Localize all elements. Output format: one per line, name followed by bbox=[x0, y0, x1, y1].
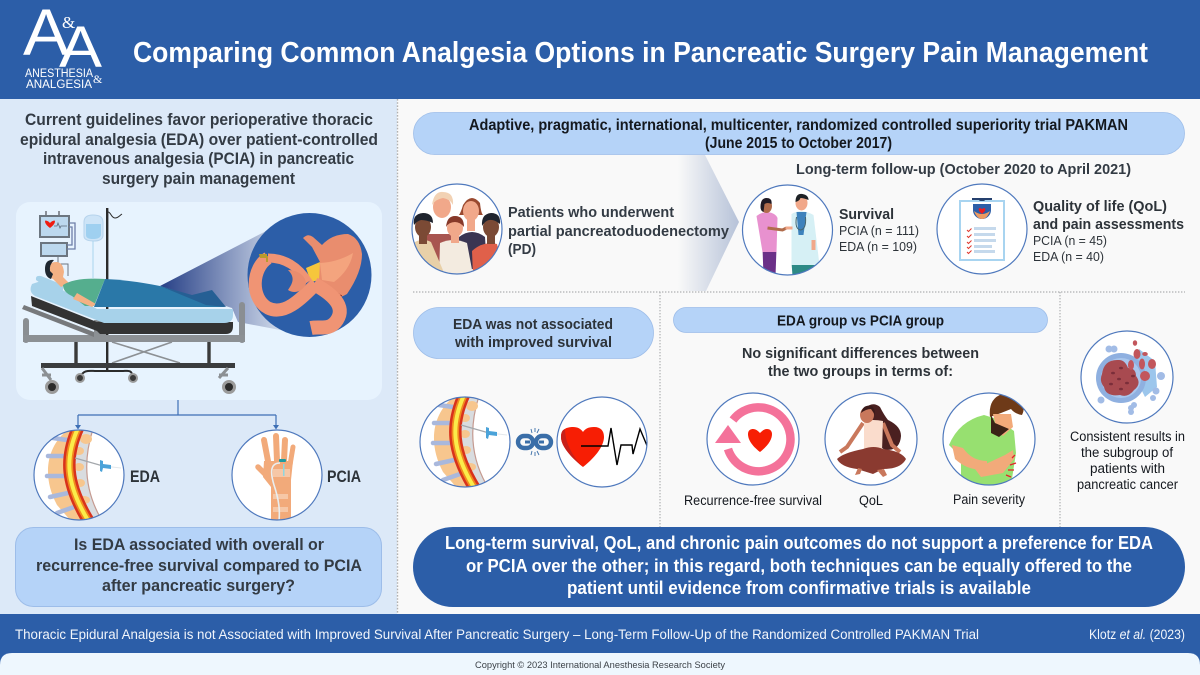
flow chevron bbox=[678, 155, 739, 291]
follow-up heading: Long-term follow-up (October 2020 to April 2021) bbox=[796, 161, 1131, 178]
icon: broken link bbox=[518, 428, 551, 456]
no differences text: the two groups in terms of: bbox=[768, 363, 953, 380]
panel: background guidelines bbox=[0, 99, 397, 614]
icon: heart with ECG bbox=[557, 397, 648, 487]
zoom cone bbox=[160, 230, 280, 330]
conclusion callout: patient until evidence from confirmative trials is available bbox=[567, 577, 1031, 598]
question box: Is EDA associated with overall or bbox=[74, 535, 324, 554]
subgroup text: Consistent results in bbox=[1070, 429, 1185, 444]
journal logo: ANALGESIA bbox=[26, 79, 92, 91]
conclusion callout: or PCIA over the other; in this regard, both techniques can be equally offered to the bbox=[466, 555, 1132, 576]
illustration card bbox=[16, 202, 382, 400]
survival text: Survival bbox=[839, 206, 894, 223]
journal logo: & bbox=[62, 13, 75, 32]
icon: patient and doctor bbox=[742, 185, 832, 276]
subgroup text: patients with bbox=[1090, 461, 1165, 476]
subgroup text bbox=[1070, 429, 1185, 492]
panel: subgroup bbox=[1070, 331, 1185, 492]
icon: recurrence-free survival bbox=[707, 393, 799, 485]
QoL and pain text: EDA (n = 40) bbox=[1033, 249, 1104, 264]
patient bbox=[36, 260, 226, 307]
journal logo: A bbox=[59, 15, 102, 80]
trial pill: Adaptive, pragmatic, international, multicenter, randomized controlled superiority trial PAKMAN bbox=[469, 117, 1128, 134]
icon: man with abdominal pain bbox=[943, 393, 1035, 485]
bed frame bbox=[22, 302, 245, 392]
footer band bbox=[0, 614, 1200, 675]
trial pill: (June 2015 to October 2017) bbox=[705, 135, 892, 152]
connector arrows bbox=[75, 400, 279, 430]
panel: trial design bbox=[409, 112, 1184, 291]
copyright strip bbox=[0, 653, 1200, 675]
guidelines text: epidural analgesia (EDA) over patient-controlled bbox=[20, 131, 378, 149]
panel: group comparison bbox=[674, 308, 1048, 508]
illustration: patient on hospital bed bbox=[22, 208, 280, 392]
comparison pill: EDA group vs PCIA group bbox=[777, 312, 944, 330]
magnified pancreas anatomy bbox=[248, 213, 372, 337]
patient group text: Patients who underwent bbox=[508, 204, 674, 221]
icon: EDA spine bbox=[34, 428, 124, 522]
icon: meditating woman bbox=[825, 393, 917, 485]
icon: PCIA hand bbox=[232, 430, 322, 521]
question box bbox=[16, 528, 382, 606]
mattress bbox=[31, 280, 233, 334]
survival text: EDA (n = 109) bbox=[839, 239, 917, 254]
PCIA label: PCIA bbox=[327, 468, 361, 486]
guidelines text bbox=[20, 111, 378, 188]
journal logo bbox=[23, 0, 103, 91]
header band bbox=[0, 0, 1200, 99]
patient group text bbox=[508, 204, 730, 258]
journal logo: & bbox=[93, 72, 103, 86]
icon: EDA spine small bbox=[420, 395, 510, 489]
guidelines text: surgery pain management bbox=[102, 170, 295, 188]
finding pill: EDA was not associated bbox=[453, 316, 613, 333]
QoL and pain text bbox=[1033, 198, 1184, 264]
patient group text: partial pancreatoduodenectomy bbox=[508, 223, 730, 240]
icon: pancreatic cancer cells bbox=[1081, 331, 1173, 423]
question box: after pancreatic surgery? bbox=[102, 576, 295, 595]
EDA label: EDA bbox=[130, 468, 160, 486]
icon: QoL clipboard bbox=[937, 184, 1027, 274]
subgroup text: pancreatic cancer bbox=[1077, 477, 1178, 492]
no differences text: No significant differences between bbox=[742, 345, 979, 362]
comparison pill bbox=[674, 308, 1048, 332]
copyright: Copyright © 2023 International Anesthesia Research Society bbox=[475, 660, 725, 671]
label: pain severity: Pain severity bbox=[953, 492, 1025, 507]
conclusion callout bbox=[413, 527, 1185, 607]
guidelines text: Current guidelines favor perioperative thoracic bbox=[25, 111, 373, 129]
trial pill bbox=[414, 112, 1184, 154]
monitor and iv stand bbox=[40, 208, 122, 370]
survival text: PCIA (n = 111) bbox=[839, 223, 919, 238]
label: recurrence-free survival: Recurrence-free survival bbox=[684, 493, 822, 508]
QoL and pain text: PCIA (n = 45) bbox=[1033, 233, 1107, 248]
no differences text bbox=[742, 345, 979, 380]
citation author: Klotz et al. (2023) bbox=[1089, 627, 1185, 642]
finding pill: with improved survival bbox=[454, 334, 612, 351]
icon: group of patients bbox=[409, 184, 505, 275]
label: QoL: QoL bbox=[859, 493, 883, 508]
journal logo: ANESTHESIA bbox=[25, 68, 93, 80]
guidelines text: intravenous analgesia (PCIA) in pancreatic bbox=[43, 150, 354, 168]
panel: survival finding bbox=[414, 308, 654, 489]
question box: recurrence-free survival compared to PCIA bbox=[36, 556, 362, 575]
QoL and pain text: and pain assessments bbox=[1033, 216, 1184, 233]
survival text bbox=[839, 206, 919, 254]
QoL and pain text: Quality of life (QoL) bbox=[1033, 198, 1167, 215]
finding pill bbox=[414, 308, 654, 358]
subgroup text: the subgroup of bbox=[1081, 445, 1173, 460]
citation title: Thoracic Epidural Analgesia is not Associated with Improved Survival After Pancreatic Surgery – Long-Term Follow-Up of the Randomized Controlled PAKMAN Trial bbox=[15, 627, 979, 642]
patient group text: (PD) bbox=[508, 241, 536, 258]
